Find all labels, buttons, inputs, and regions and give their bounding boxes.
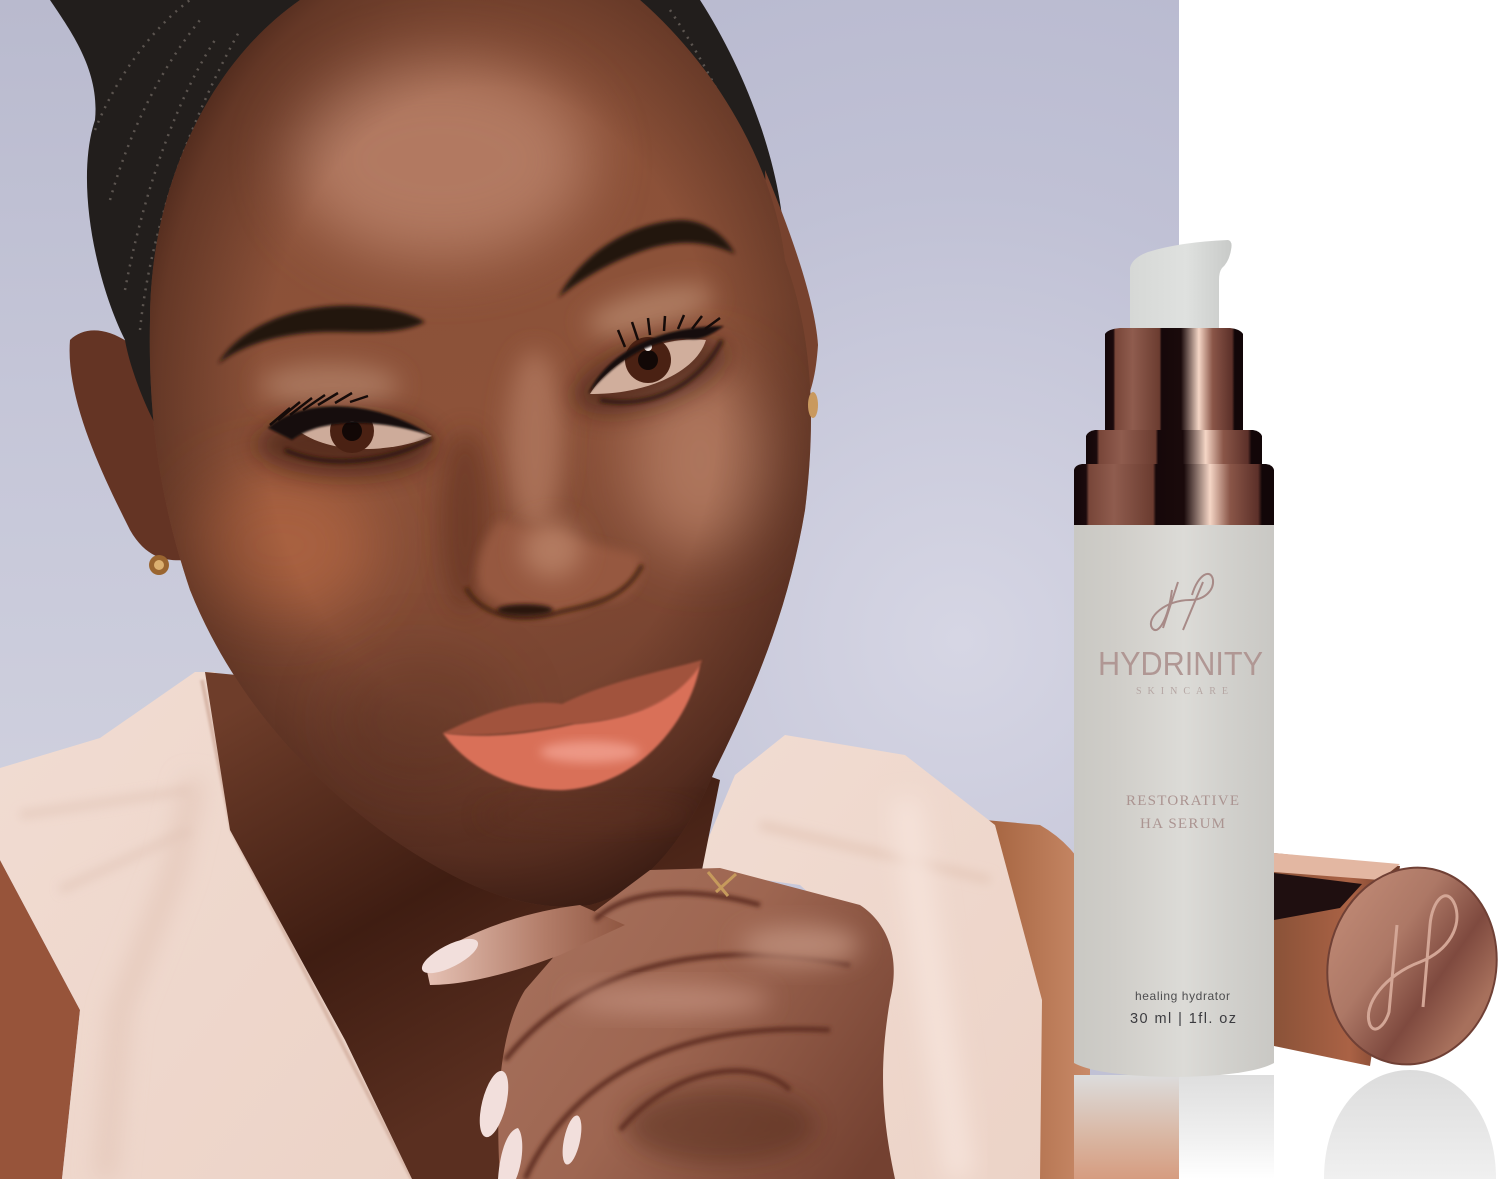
blouse right xyxy=(695,735,1042,1179)
right eye xyxy=(564,315,736,430)
product name xyxy=(1126,793,1239,832)
left eye xyxy=(255,393,435,477)
volume: 30 ml | 1fl. oz xyxy=(1130,1011,1236,1027)
right earring xyxy=(808,392,818,418)
skin shading xyxy=(100,0,860,950)
portrait of woman xyxy=(0,0,1090,1179)
pump head xyxy=(1130,240,1232,328)
product descriptor: healing hydrator xyxy=(1135,989,1230,1003)
product: reflections xyxy=(1074,1070,1496,1179)
palm shadow xyxy=(625,1087,815,1163)
bottle reflection over photo xyxy=(1074,1075,1179,1179)
blouse left xyxy=(0,672,412,1179)
photo background xyxy=(0,0,1179,1179)
hair xyxy=(50,0,785,440)
lips xyxy=(443,660,702,790)
upper collar xyxy=(1105,328,1243,430)
product: lying cap xyxy=(1274,852,1500,1080)
product name: RESTORATIVE xyxy=(1126,793,1239,809)
bottle body xyxy=(1074,525,1274,1077)
middle collar xyxy=(1086,430,1262,466)
left eyebrow xyxy=(218,306,425,364)
floor reflection of cap xyxy=(1324,1070,1496,1179)
hand xyxy=(417,868,895,1179)
right eyebrow xyxy=(558,220,735,298)
left earring xyxy=(149,555,169,575)
knuckle creases xyxy=(505,893,850,1179)
cap top highlight xyxy=(1274,853,1400,880)
left ear xyxy=(70,330,190,560)
product name: HA SERUM xyxy=(1140,816,1225,832)
logo monogram xyxy=(1151,574,1213,630)
brand name: HYDRINITY xyxy=(1098,645,1263,682)
right shoulder xyxy=(985,820,1090,1179)
face xyxy=(150,0,811,906)
neck xyxy=(205,672,720,1179)
cap monogram xyxy=(1368,896,1457,1029)
bottle reflection over white xyxy=(1179,1075,1274,1179)
cap dark band xyxy=(1274,873,1362,920)
index finger xyxy=(425,905,625,985)
lower collar xyxy=(1074,464,1274,525)
ring xyxy=(708,872,736,896)
right ear xyxy=(765,170,818,392)
left shoulder xyxy=(0,860,80,1179)
cap end ellipse xyxy=(1309,852,1500,1080)
product: serum bottle xyxy=(1074,240,1274,1077)
brand subline: SKINCARE xyxy=(1136,686,1228,697)
cap side xyxy=(1274,853,1400,1066)
fingernails xyxy=(417,932,585,1179)
nose xyxy=(466,520,642,618)
